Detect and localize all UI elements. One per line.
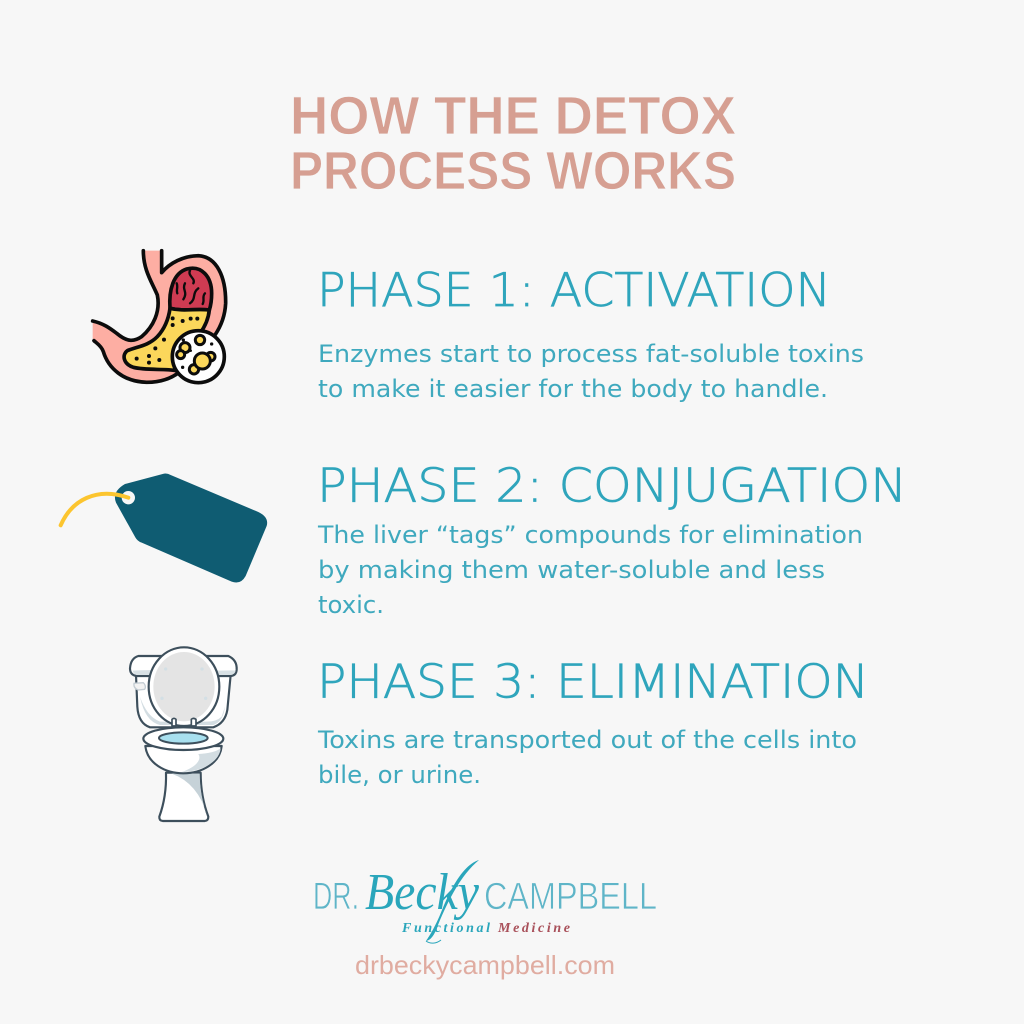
phase 2 description: toxic.: [318, 591, 384, 619]
title: [290, 86, 736, 201]
logo: Medicine: [497, 921, 570, 936]
website url: drbeckycampbell.com: [355, 950, 615, 980]
phase 1 description: [318, 340, 864, 403]
phase 3 description: [317, 726, 857, 789]
logo: Becky: [365, 864, 480, 921]
phase 1 heading: PHASE 1: ACTIVATION: [317, 263, 831, 317]
logo: DR.: [313, 876, 359, 918]
icon: stomach: [93, 251, 226, 383]
phase 1 description: Enzymes start to process fat-soluble toxins: [318, 340, 864, 368]
icon: toilet: [130, 647, 237, 821]
phase 3 heading: PHASE 3: ELIMINATION: [317, 654, 869, 708]
phase 1 description: to make it easier for the body to handle.: [318, 375, 828, 403]
logo: [313, 860, 657, 943]
phase 3 description: Toxins are transported out of the cells into: [317, 726, 857, 754]
stool sample circle: [172, 331, 224, 383]
title: PROCESS WORKS: [290, 141, 736, 201]
logo: Functional: [401, 921, 490, 936]
phase 3 description: bile, or urine.: [318, 761, 481, 789]
logo: CAMPBELL: [484, 876, 657, 918]
phase 2 heading: PHASE 2: CONJUGATION: [317, 458, 907, 512]
phase 2 description: The liver “tags” compounds for elimination: [317, 521, 863, 549]
phase 2 description: by making them water-soluble and less: [318, 556, 825, 584]
phase 2 description: [317, 521, 863, 619]
title: HOW THE DETOX: [290, 86, 736, 146]
icon: price tag: [61, 474, 267, 583]
